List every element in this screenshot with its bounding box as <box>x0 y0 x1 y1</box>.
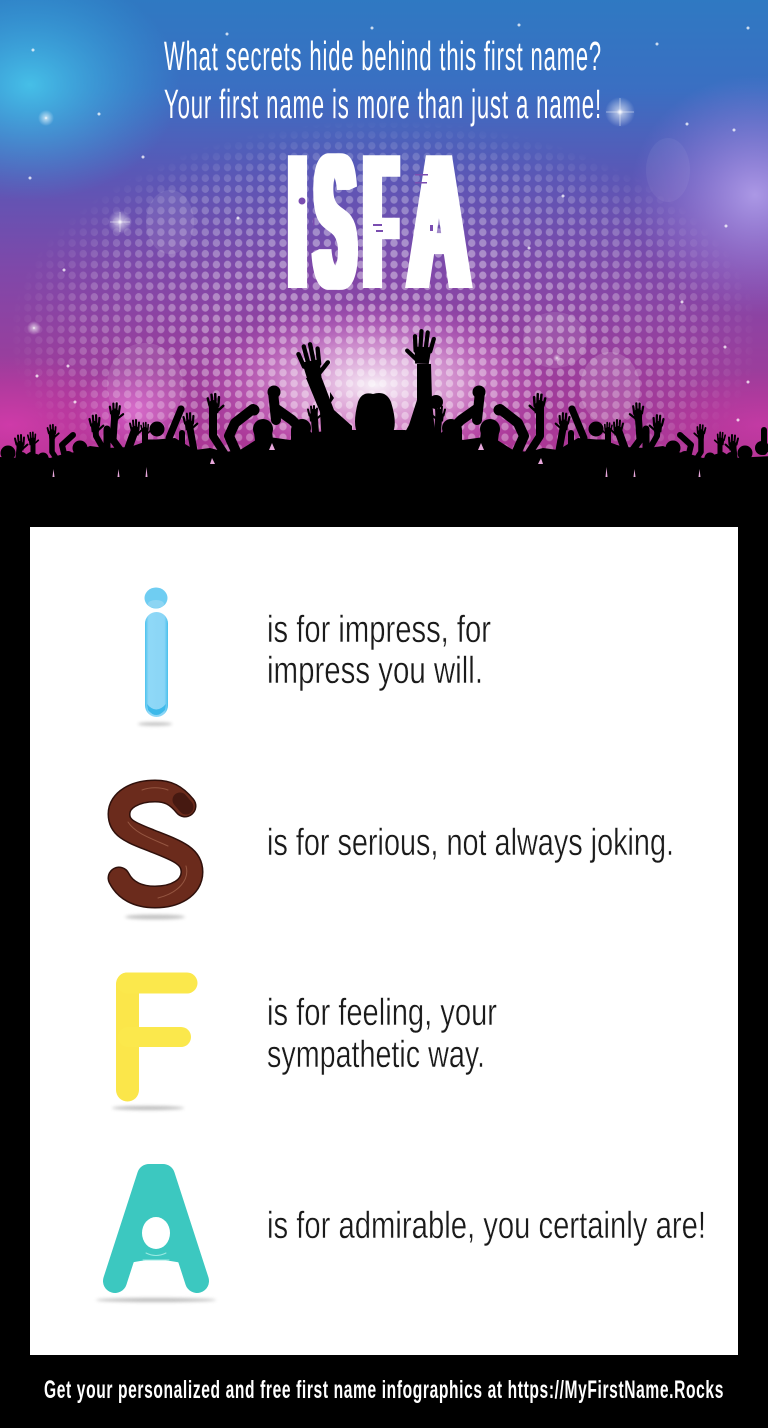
name title: ISFA: A <box>409 115 469 330</box>
banner: concert background <box>0 0 768 495</box>
row: letter I <box>138 588 491 726</box>
text: F line: is for feeling, your <box>267 992 497 1034</box>
name title: ISFA <box>290 113 469 330</box>
icon: yellow letter F <box>112 983 187 1110</box>
icon: blue letter i <box>138 588 172 726</box>
text: F line <box>267 992 497 1076</box>
row: letter S <box>119 788 674 919</box>
text: I line <box>267 609 491 692</box>
text: F line: sympathetic way. <box>267 1034 485 1076</box>
text: I line: is for impress, for <box>267 609 491 651</box>
heading text <box>164 33 602 127</box>
text: I line: impress you will. <box>267 650 483 692</box>
stars <box>27 24 750 422</box>
name title: ISFA: S <box>316 115 354 330</box>
white content panel <box>30 527 738 1355</box>
name title: ISFA: F <box>366 113 396 329</box>
icon: teal letter A <box>96 1176 216 1302</box>
crowd silhouette <box>0 331 768 497</box>
row: letter A <box>96 1176 706 1302</box>
row: letter F <box>112 983 497 1110</box>
icon: brown letter S <box>119 788 192 919</box>
main figure <box>297 331 443 445</box>
name title: ISFA: I <box>290 113 304 329</box>
